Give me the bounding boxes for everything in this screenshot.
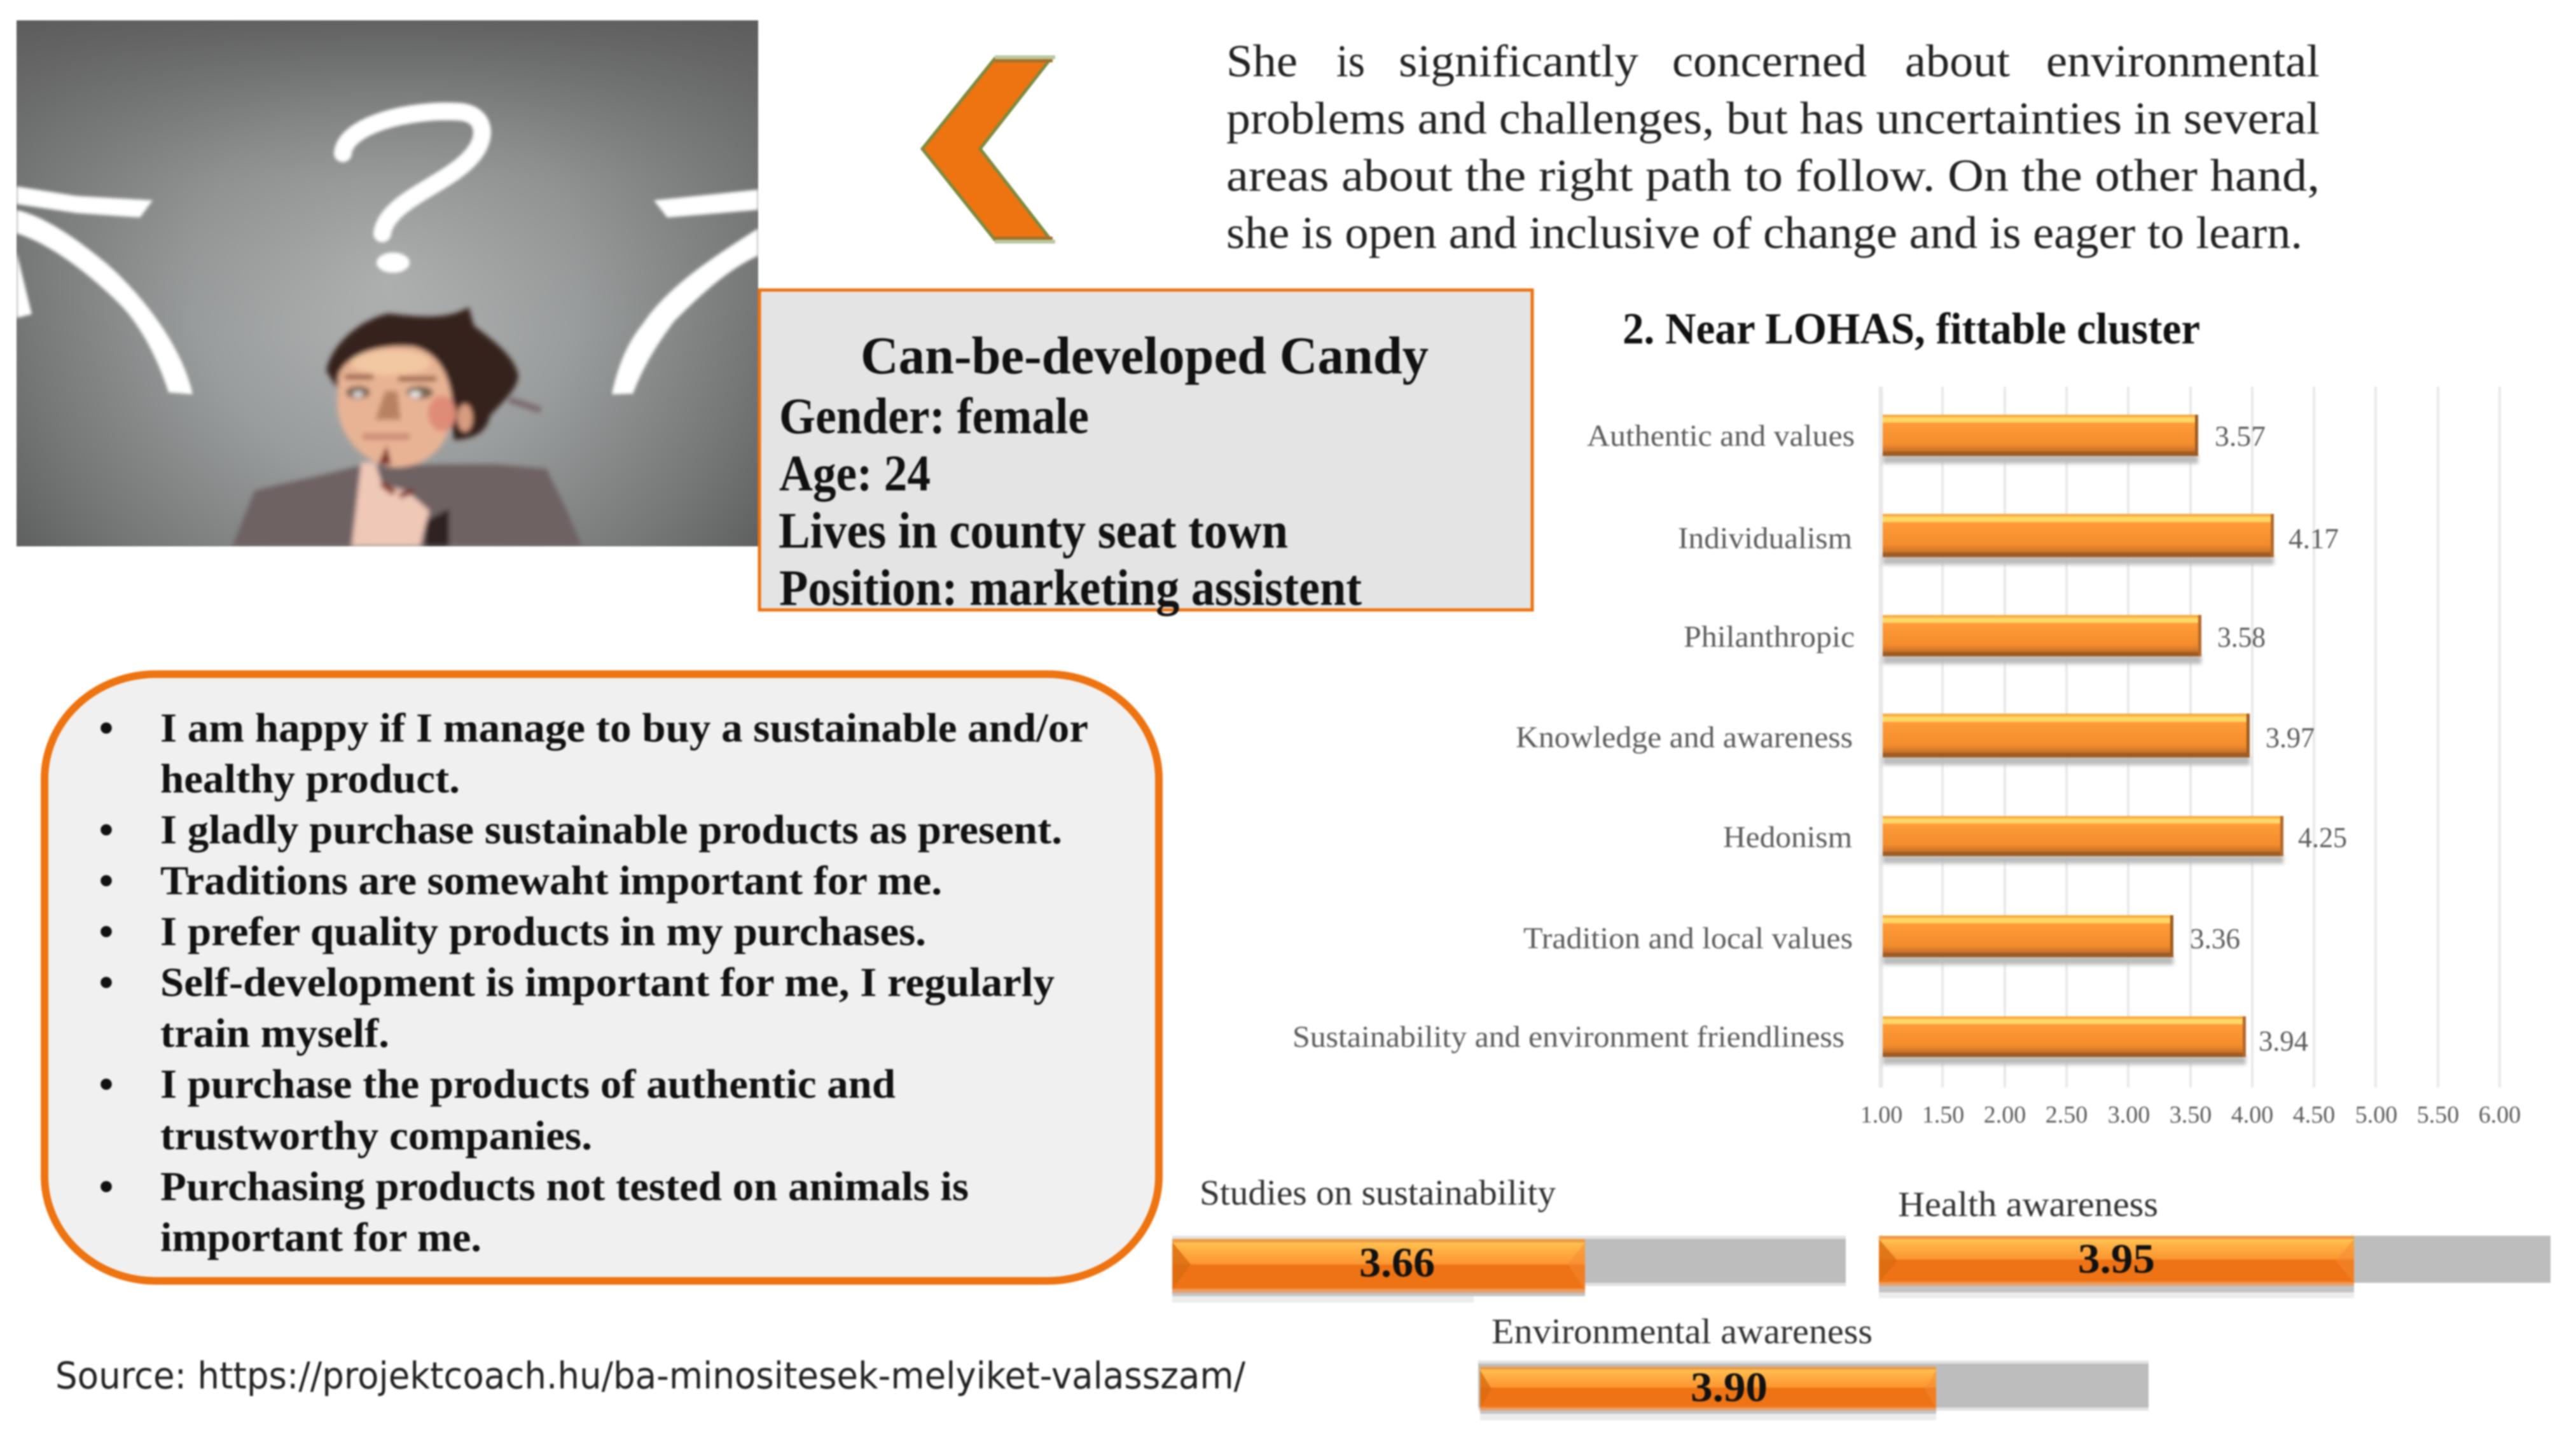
- x axis labels: 2.50: [2046, 1102, 2088, 1128]
- x axis labels: [1860, 1102, 2521, 1128]
- progress bar: Environmental awareness: [1478, 1312, 2149, 1420]
- x axis labels: 3.50: [2170, 1102, 2212, 1128]
- progress bar: Health awareness: Health awareness: [1898, 1185, 2158, 1224]
- bar chart: near LOHAS cluster: [1292, 387, 2521, 1128]
- x axis labels: 1.00: [1860, 1102, 1902, 1128]
- bar: Knowledge and awareness: 3.97: [2266, 721, 2315, 754]
- text block: persona description: She: [1226, 36, 1298, 86]
- bar: Individualism: [1678, 514, 2339, 565]
- x axis labels: 4.00: [2231, 1102, 2273, 1128]
- bullet list text: •: [99, 1164, 113, 1210]
- bar: Tradition and local values: 3.36: [2190, 922, 2240, 955]
- bullet list text: trustworthy companies.: [160, 1113, 592, 1159]
- bar: Individualism: Individualism: [1678, 522, 1852, 555]
- bar: Philanthropic: Philanthropic: [1684, 620, 1855, 654]
- bar: Sustainability and environment friendliness: Sustainability and environment friendliness: [1292, 1020, 1845, 1054]
- bar: Knowledge and awareness: [1516, 714, 2315, 765]
- panel: persona card: [759, 290, 1532, 616]
- bullet list text: important for me.: [160, 1215, 481, 1261]
- bullet list text: [99, 705, 1088, 1261]
- progress bar: Studies on sustainability: Studies on sustainability: [1200, 1173, 1556, 1213]
- bar: Hedonism: [1723, 816, 2347, 864]
- bar: Philanthropic: [1684, 615, 2266, 664]
- icon: chalk question mark: [343, 111, 482, 273]
- bullet list text: •: [99, 807, 113, 853]
- bar: Authentic and values: Authentic and values: [1587, 419, 1855, 453]
- bullet list text: •: [99, 960, 113, 1006]
- persona details: Age: 24: [779, 446, 931, 502]
- bullet list text: •: [99, 1061, 113, 1107]
- bullet list text: I am happy if I manage to buy a sustainable and/or: [160, 705, 1088, 751]
- progress bar: Environmental awareness: 3.90: [1691, 1364, 1768, 1411]
- x axis labels: 3.00: [2108, 1102, 2150, 1128]
- bar: Individualism: 4.17: [2289, 522, 2339, 555]
- icon: left chalk arrow: [17, 186, 193, 394]
- persona details: Gender: female: [779, 389, 1089, 445]
- persona details: Position: marketing assistent: [779, 560, 1362, 616]
- x axis labels: 4.50: [2293, 1102, 2335, 1128]
- woman's hair: [326, 307, 518, 440]
- bar: Authentic and values: [1587, 415, 2266, 464]
- text block: persona description: problems and challenges, but has uncertainties in several: [1226, 93, 2320, 144]
- x axis labels: 5.00: [2355, 1102, 2397, 1128]
- bar: Sustainability and environment friendliness: 3.94: [2259, 1025, 2308, 1057]
- progress bar: Studies on sustainability: 3.66: [1359, 1240, 1435, 1286]
- bar: Knowledge and awareness: Knowledge and awareness: [1516, 721, 1853, 754]
- persona name: Can-be-developed Candy: [861, 326, 1429, 385]
- text block: persona description: areas about the right path to follow. On the other hand,: [1226, 150, 2320, 201]
- bullet list text: Traditions are somewaht important for me.: [160, 858, 942, 904]
- bar: Philanthropic: 3.58: [2217, 621, 2266, 653]
- bullet list text: I prefer quality products in my purchases.: [160, 909, 926, 955]
- arrow: orange chevron: [922, 55, 1055, 244]
- bar: Tradition and local values: [1523, 915, 2240, 965]
- x axis labels: 6.00: [2479, 1102, 2521, 1128]
- text block: persona description: [1226, 36, 2320, 258]
- bullet list text: Purchasing products not tested on animals is: [160, 1164, 969, 1210]
- bar: Hedonism: 4.25: [2298, 821, 2347, 854]
- text block: persona description: she is open and inclusive of change and is eager to learn.: [1226, 207, 2302, 258]
- persona details: Lives in county seat town: [779, 503, 1288, 559]
- bullet list text: •: [99, 705, 113, 751]
- x axis labels: 1.50: [1922, 1102, 1964, 1128]
- chart heading: 2. Near LOHAS, fittable cluster: [1623, 305, 2200, 354]
- woman's hand: [352, 462, 429, 546]
- photo: woman thinking under question mark: [17, 20, 758, 546]
- bullet list text: healthy product.: [160, 756, 460, 802]
- text block: persona description: concerned: [1672, 36, 1867, 86]
- x axis labels: 2.00: [1984, 1102, 2026, 1128]
- text block: persona description: environmental: [2046, 36, 2320, 86]
- bar: Tradition and local values: Tradition and local values: [1523, 922, 1853, 955]
- text block: persona description: is: [1336, 36, 1365, 86]
- bullet list text: •: [99, 858, 113, 904]
- source note: Source: https://projektcoach.hu/ba-minositesek-melyiket-valasszam/: [55, 1354, 1245, 1397]
- bullet list text: I purchase the products of authentic and: [160, 1061, 896, 1107]
- woman's face: [337, 346, 453, 467]
- text block: persona description: about: [1905, 36, 2010, 86]
- icon: right chalk arrow: [612, 190, 758, 394]
- progress bar: Environmental awareness: Environmental awareness: [1492, 1312, 1873, 1352]
- bullet list text: •: [99, 909, 113, 955]
- bar: Sustainability and environment friendliness: [1292, 1016, 2308, 1065]
- bar: Hedonism: Hedonism: [1723, 820, 1852, 854]
- text block: persona description: significantly: [1399, 36, 1638, 86]
- bar: Authentic and values: 3.57: [2215, 420, 2266, 452]
- progress bar: Studies on sustainability: [1172, 1173, 1846, 1303]
- woman's sweater: [232, 464, 582, 546]
- progress bar: Health awareness: 3.95: [2078, 1236, 2155, 1282]
- panel: statements list: [45, 674, 1159, 1281]
- x axis labels: 5.50: [2417, 1102, 2459, 1128]
- bullet list text: I gladly purchase sustainable products as present.: [160, 807, 1062, 853]
- bullet list text: train myself.: [160, 1011, 389, 1056]
- progress bar: Health awareness: [1879, 1185, 2551, 1298]
- persona details: [779, 389, 1362, 616]
- bullet list text: Self-development is important for me, I regularly: [160, 960, 1055, 1006]
